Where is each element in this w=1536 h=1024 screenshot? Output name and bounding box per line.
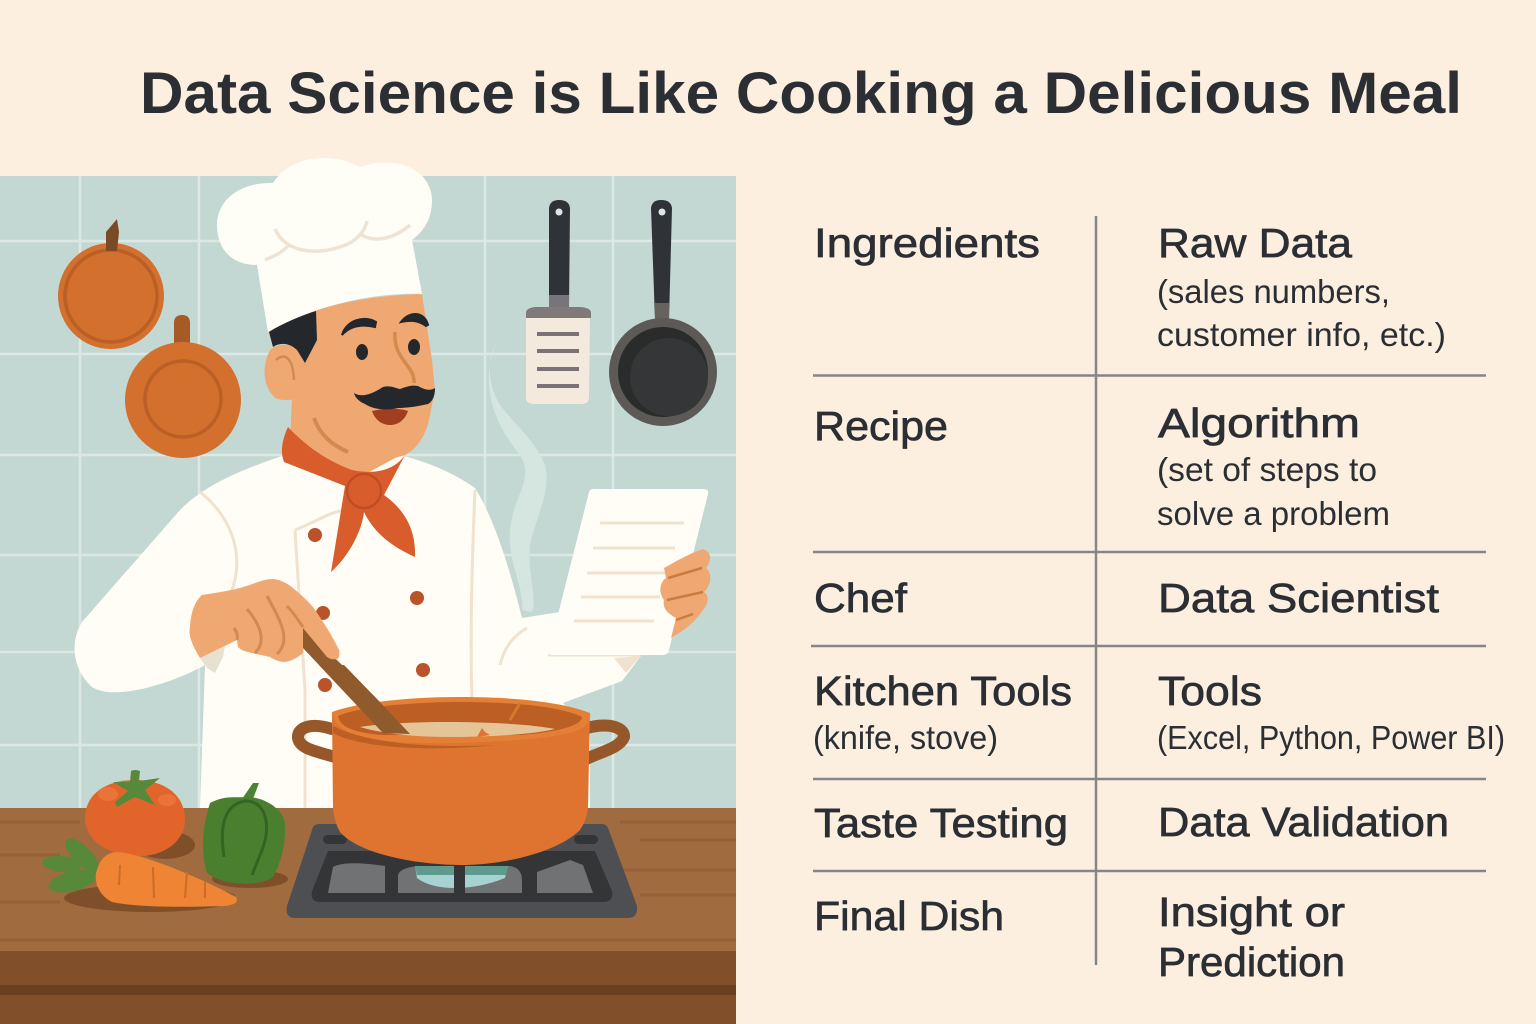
row: kitchen tools: (Excel, Python, Power BI) bbox=[1157, 719, 1505, 756]
icon: hanging spatula bbox=[526, 200, 591, 404]
icon: hanging copper pan small bbox=[58, 219, 164, 349]
neckerchief bbox=[282, 427, 415, 572]
title: Data Science is Like Cooking a Delicious Meal bbox=[140, 61, 1462, 126]
ear bbox=[265, 345, 300, 400]
spoon in pot bbox=[319, 665, 410, 734]
jacket folds bbox=[200, 490, 640, 808]
jaw shadow bbox=[314, 418, 348, 452]
icon: tomato bbox=[85, 770, 195, 859]
row: ingredients: customer info, etc.) bbox=[1157, 316, 1446, 353]
hat folds bbox=[265, 221, 410, 260]
row: taste testing: Data Validation bbox=[1158, 799, 1449, 845]
row: final dish: Final Dish bbox=[814, 893, 1004, 939]
wooden counter bbox=[0, 808, 736, 1024]
hair bbox=[269, 311, 317, 363]
pot rim bbox=[332, 697, 590, 743]
row: recipe: Algorithm bbox=[1158, 400, 1360, 446]
jacket buttons bbox=[308, 528, 430, 692]
row: final dish bbox=[814, 889, 1345, 985]
row: ingredients bbox=[814, 220, 1446, 353]
face bbox=[268, 294, 435, 470]
row: kitchen tools: (knife, stove) bbox=[813, 719, 998, 756]
icon: green pepper bbox=[203, 783, 288, 888]
eyes bbox=[356, 344, 368, 360]
eyebrows bbox=[342, 314, 428, 335]
comparison table dividers bbox=[811, 216, 1486, 965]
soup carrot bbox=[477, 728, 490, 737]
icon: carrot bbox=[41, 833, 237, 912]
row: recipe: Recipe bbox=[814, 403, 948, 449]
row: kitchen tools: Kitchen Tools bbox=[814, 668, 1072, 714]
icon: hanging black frying pan bbox=[609, 200, 717, 426]
chef hat bbox=[217, 158, 432, 332]
steam bbox=[489, 341, 547, 612]
row: recipe bbox=[814, 400, 1390, 532]
row: recipe: solve a problem bbox=[1157, 495, 1390, 532]
row: taste testing bbox=[814, 799, 1449, 846]
row: chef: Data Scientist bbox=[1158, 575, 1440, 621]
recipe paper bbox=[548, 489, 708, 655]
row: chef bbox=[814, 575, 1440, 621]
cuff bbox=[614, 656, 641, 673]
row: kitchen tools: Tools bbox=[1158, 668, 1262, 714]
panel: kitchen illustration bbox=[0, 158, 736, 1024]
left hand bbox=[189, 579, 339, 662]
row: final dish: Insight or bbox=[1158, 889, 1345, 935]
ear line bbox=[276, 357, 294, 380]
gas stove bbox=[287, 824, 637, 918]
row: ingredients: Ingredients bbox=[814, 220, 1040, 266]
row: ingredients: (sales numbers, bbox=[1157, 273, 1390, 310]
tiled wall bbox=[0, 176, 736, 816]
left cuff bbox=[200, 646, 225, 673]
cooking pot bbox=[298, 665, 624, 865]
row: recipe: (set of steps to bbox=[1157, 451, 1377, 488]
pot body bbox=[332, 712, 590, 865]
row: kitchen tools bbox=[813, 668, 1505, 756]
rim shadow bbox=[333, 726, 496, 748]
icon: hanging copper pan large bbox=[125, 315, 241, 458]
interior notch bbox=[510, 703, 520, 720]
soup bbox=[360, 722, 555, 737]
neckerchief knot bbox=[347, 474, 381, 508]
nose bbox=[395, 332, 414, 383]
jacket bbox=[75, 455, 641, 808]
mouth bbox=[372, 409, 408, 425]
row: chef: Chef bbox=[814, 575, 908, 621]
pot interior bbox=[338, 702, 582, 735]
chef bbox=[75, 158, 710, 808]
row: ingredients: Raw Data bbox=[1158, 220, 1352, 266]
wooden spoon handle bbox=[303, 627, 410, 734]
moustache bbox=[354, 386, 435, 409]
pot handles bbox=[298, 726, 624, 760]
row: final dish: Prediction bbox=[1158, 939, 1345, 985]
neck bbox=[290, 398, 414, 485]
right hand bbox=[660, 549, 710, 638]
row: taste testing: Taste Testing bbox=[814, 800, 1068, 846]
